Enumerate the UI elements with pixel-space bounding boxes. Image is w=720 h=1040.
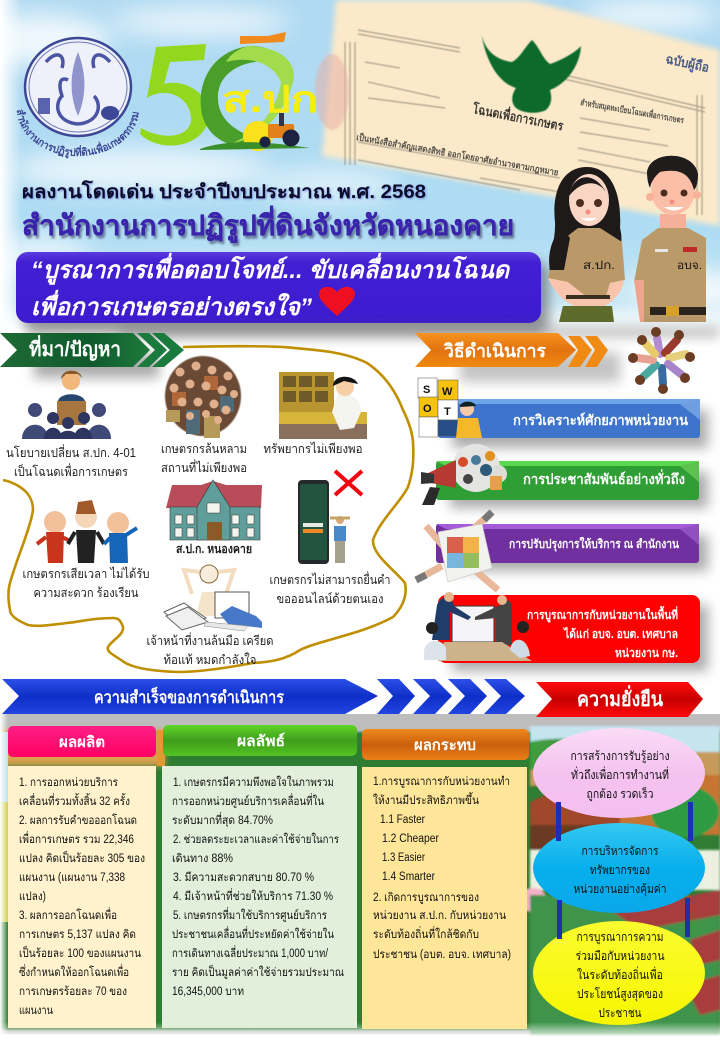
- icon: business meeting: [424, 592, 532, 661]
- illustration: officer man: [634, 156, 706, 322]
- method: capability analysis: การวิเคราะห์ศักยภาพหน่วยงาน: [513, 412, 688, 428]
- text: impact list: 1.3 Easier: [382, 852, 425, 864]
- icon: speaker and audience: [22, 371, 111, 439]
- logo: land reform office seal: [16, 36, 139, 158]
- sustainability: resource management: หน่วยงานอย่างคุ้มค่า: [574, 882, 666, 897]
- method: service improvement: การปรับปรุงการให้บริการ ณ สำนักงาน: [509, 536, 680, 552]
- text: impact list: ระดับท้องถิ่นที่ใกล้ชิดกับ: [373, 926, 479, 941]
- text: impact list: ให้งานมีประสิทธิภาพขึ้น: [373, 792, 479, 807]
- sustainability: resource management: [533, 823, 705, 913]
- gold outline around problems: [3, 346, 413, 672]
- land title deed document: เป็นหนังสือสำคัญแสดงสิทธิ ออกโดยอาศัยอำนาจตามกฎหมาย: [355, 130, 560, 179]
- section header: results of the operation: [2, 679, 525, 714]
- text: outcome list: 16,345,000 บาท: [172, 986, 244, 998]
- illustration: officer woman: [548, 167, 625, 322]
- method: local agency integration: การบูรณาการกับหน่วยงานในพื้นที่: [527, 605, 678, 623]
- slogan box: เพื่อการเกษตรอย่างตรงใจ”: [31, 289, 312, 321]
- text: output list: 3. ผลการออกโฉนดเพื่อ: [19, 907, 117, 922]
- icon: man at empty shelves: [279, 372, 367, 439]
- icon: tractor: [260, 113, 300, 148]
- text: output list: แผนงาน (แผนงาน 7,338: [19, 872, 125, 884]
- icon: stressed worker with paperwork: [164, 565, 262, 631]
- text: output list: เพื่อการเกษตร รวม 22,346: [19, 831, 134, 846]
- panel: output: [8, 726, 156, 1028]
- subtitle: ผลงานโดดเด่น ประจำปีงบประมาณ พ.ศ. 2568: [22, 180, 426, 203]
- sustainability: awareness: ทั่วถึงเพื่อการทำงานที่: [571, 766, 669, 782]
- text: impact list: 1.การบูรณาการกับหน่วยงานทำ: [373, 775, 510, 788]
- sustainability: resource management: ทรัพยากรของ: [590, 863, 650, 877]
- land title deed document: สำหรับสมุดทะเบียนโฉนดเพื่อการเกษตร: [579, 95, 685, 126]
- text: outcome list: การเดินทางเฉลี่ยประมาณ 1,000 บาท/: [172, 945, 329, 960]
- problem: not enough resources: [264, 372, 367, 456]
- sustainability: local cooperation: [533, 921, 705, 1025]
- text: impact list: ประชาชน (อบต. อบจ. เทศบาล): [373, 949, 511, 961]
- method: service improvement: [416, 512, 699, 590]
- problem: farmers lose time: [22, 500, 150, 600]
- problem: farmers lose time: ความสะดวก ร้องเรียน: [34, 586, 139, 600]
- text: impact list: 1.1 Faster: [380, 814, 425, 826]
- icon: SWOT blocks and person: O: [423, 403, 432, 415]
- heading: outcome: ผลลัพธ์: [237, 732, 285, 750]
- sustainability: local cooperation: ประโยชน์สูงสุดของ: [577, 987, 663, 1002]
- problem: farmers cannot apply online: ขอออนไลน์ด้วยตนเอง: [276, 592, 384, 606]
- illustration: officer man: อบจ.: [677, 260, 702, 272]
- text: output list: ซึ่งกำหนดให้ออกโฉนดเพื่อ: [19, 964, 129, 979]
- logo: land reform office seal: สำนักงานการปฏิรูปที่ดินเพื่อเกษตรกรรม: [16, 110, 139, 158]
- icon: three arguing men: [37, 500, 137, 563]
- center: local office building: [166, 480, 262, 556]
- problem: too many farmers: [161, 356, 247, 475]
- text: output list: 1. การออกหน่วยบริการ: [19, 776, 118, 789]
- text: impact list: หน่วยงาน ส.ป.ก. กับหน่วยงาน: [373, 910, 506, 922]
- problem: too many farmers: เกษตรกรล้นหลาม: [161, 442, 247, 456]
- problem: staff overloaded: ท้อแท้ หมดกำลังใจ: [164, 653, 256, 667]
- text: impact list: [373, 775, 511, 961]
- method: local agency integration: [424, 592, 700, 663]
- heading: output: ผลผลิต: [59, 733, 105, 751]
- method: public relations: [421, 444, 699, 505]
- text: outcome list: เดินทาง 88%: [172, 852, 233, 865]
- icon: SWOT blocks and person: W: [442, 386, 453, 398]
- section header: sustainability: [536, 682, 703, 717]
- sustainability: awareness: การสร้างการรับรู้อย่าง: [570, 749, 670, 764]
- title: สำนักงานการปฏิรูปที่ดินจังหวัดหนองคาย: [24, 208, 516, 246]
- text: outcome list: 2. ช่วยลดระยะเวลาและค่าใช้จ่ายในการ: [173, 833, 339, 846]
- land title deed document: โฉนดเพื่อการเกษตร: [471, 99, 565, 134]
- section header: background and problem: ที่มา/ปัญหา: [29, 334, 121, 361]
- panel: outcome: [162, 725, 357, 1028]
- logo: 50 years anniversary: [140, 32, 318, 151]
- icon: red cross: [335, 471, 362, 495]
- text: output list: เป็นร้อยละ 100 ของแผนงาน: [19, 945, 141, 960]
- section header: results of the operation: ความสำเร็จของการดำเนินการ: [94, 685, 285, 707]
- shadows behind middle section: [34, 328, 720, 671]
- sustainability: local cooperation: ร่วมมือกับหน่วยงาน: [576, 949, 664, 963]
- problem: farmers lose time: เกษตรกรเสียเวลา ไม่ได้รับ: [22, 567, 150, 581]
- subtitle: ผลงานโดดเด่น ประจำปีงบประมาณ พ.ศ. 2568: [23, 181, 427, 204]
- icon: SWOT blocks and person: S: [423, 384, 430, 396]
- text: impact list: 1.2 Cheaper: [382, 833, 439, 845]
- problem: farmers cannot apply online: เกษตรกรไม่สามารถยื่นคำ: [270, 571, 390, 587]
- method: local agency integration: ได้แก่ อบจ. อบต. เทศบาล: [562, 626, 678, 641]
- icon: heart: [319, 287, 355, 316]
- text: output list: [19, 776, 145, 1017]
- text: output list: แปลง คิดเป็นร้อยละ 305 ของ: [19, 850, 145, 865]
- section header: sustainability: ความยั่งยืน: [577, 684, 663, 711]
- text: outcome list: [172, 776, 344, 998]
- text: output list: เคลื่อนที่รวมทั้งสิ้น 32 ครั้ง: [19, 793, 130, 808]
- problem: staff overloaded: เจ้าหน้าที่งานล้นมือ เครียด: [146, 632, 274, 648]
- icon: SWOT blocks and person: T: [444, 406, 451, 418]
- center: local office building: ส.ป.ก. หนองคาย: [176, 542, 252, 556]
- text: outcome list: 1. เกษตรกรมีความพึงพอใจในภาพรวม: [173, 776, 334, 789]
- problem: too many farmers: สถานที่ไม่เพียงพอ: [161, 459, 247, 475]
- problem: policy change: เป็นโฉนดเพื่อการเกษตร: [14, 463, 128, 479]
- text: outcome list: การออกหน่วยศูนย์บริการเคลื่อนที่ใน: [172, 793, 324, 808]
- illustration: officer woman: ส.ปก.: [583, 260, 615, 272]
- text: outcome list: 4. มีเจ้าหน้าที่ช่วยให้บริการ 71.30 %: [173, 888, 333, 903]
- emblem: garuda: [481, 30, 581, 113]
- sky background with clouds: [0, 0, 720, 330]
- heading: impact: ผลกระทบ: [414, 737, 476, 754]
- icon: SWOT blocks and person: [418, 378, 482, 438]
- text: output list: แปลง): [19, 891, 46, 903]
- section header: methods: [415, 333, 608, 367]
- text: output list: การเกษตรร้อยละ 70 ของ: [19, 985, 127, 998]
- logo: 50 years anniversary: ส.ปก: [222, 79, 318, 120]
- text: outcome list: ราย คิดเป็นมูลค่าค่าใช้จ่ายรวมประมาณ: [172, 964, 344, 979]
- icon: hands with puzzle pieces: [416, 512, 498, 590]
- title: สำนักงานการปฏิรูปที่ดินจังหวัดหนองคาย: [22, 205, 514, 243]
- text: outcome list: 3. มีความสะดวกสบาย 80.70 %: [173, 871, 314, 884]
- text: outcome list: ประชาชนเคลื่อนที่ประหยัดค่าใช้จ่ายใน: [172, 926, 334, 941]
- heading: outcome: [163, 725, 357, 756]
- problem: policy change: [6, 371, 136, 479]
- method: public relations: การประชาสัมพันธ์อย่างทั่วถึง: [523, 469, 685, 487]
- heading: output: [8, 726, 156, 757]
- icon: phone and farmer: [298, 480, 350, 564]
- text: output list: แผนงาน: [19, 1005, 53, 1017]
- slogan box: “บูรณาการเพื่อตอบโจทย์... ขับเคลื่อนงานโฉนด: [31, 252, 510, 285]
- method: local agency integration: หน่วยงาน กษ.: [615, 646, 678, 660]
- panel: impact: [362, 729, 529, 1029]
- sustainability pillars: [556, 802, 693, 939]
- method: capability analysis: [418, 378, 700, 438]
- section header: background and problem: [0, 333, 184, 367]
- problem: policy change: นโยบายเปลี่ยน ส.ปก. 4-01: [6, 444, 136, 460]
- problem: farmers cannot apply online: [270, 471, 390, 606]
- sustainability: local cooperation: การบูรณาการความ: [576, 930, 664, 945]
- land title deed document: ฉบับผู้ถือ: [664, 51, 711, 76]
- icon: megaphone and media cloud: [421, 444, 507, 505]
- slogan box: [16, 252, 549, 334]
- section header: methods: วิธีดำเนินการ: [443, 341, 546, 361]
- farm background scene: [0, 714, 720, 1040]
- text: output list: 2. ผลการรับคำขอออกโฉนด: [19, 813, 137, 827]
- problem: staff overloaded: [146, 565, 274, 667]
- text: impact list: 1.4 Smarter: [382, 871, 435, 883]
- text: outcome list: 5. เกษตรกรที่มาใช้บริการศูนย์บริการ: [173, 907, 327, 922]
- text: output list: การเกษตร 5,137 แปลง คิด: [19, 928, 136, 941]
- sustainability: local cooperation: ในระดับท้องถิ่นเพื่อ: [577, 966, 663, 982]
- icon: crowd: [165, 356, 241, 438]
- sustainability: awareness: ถูกต้อง รวดเร็ว: [586, 786, 654, 802]
- sustainability: local cooperation: ประชาชน: [598, 1006, 642, 1020]
- sustainability: awareness: [533, 728, 705, 818]
- text: impact list: 2. เกิดการบูรณาการของ: [373, 891, 479, 904]
- text: outcome list: ระดับมากที่สุด 84.70%: [172, 812, 273, 827]
- heading: impact: [362, 729, 529, 760]
- land title deed document: [315, 0, 720, 226]
- sustainability: resource management: การบริหารจัดการ: [582, 844, 659, 858]
- red seal stamp: [315, 54, 349, 130]
- problem: not enough resources: ทรัพยากรไม่เพียงพอ: [264, 442, 362, 456]
- icon: circle of joined hands: [628, 327, 695, 394]
